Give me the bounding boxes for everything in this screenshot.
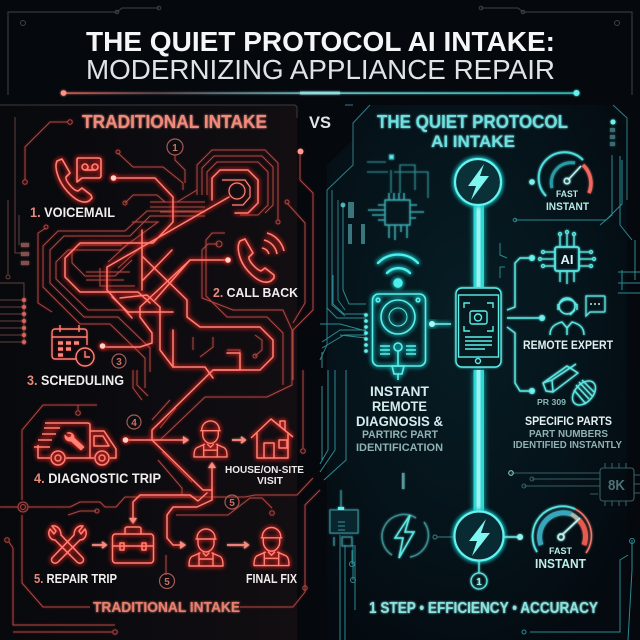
- label: top gauge fast instant: [546, 189, 589, 213]
- label: specific parts: SPECIFIC PARTS: [525, 416, 612, 428]
- connector pins on device: [364, 313, 368, 353]
- panel: traditional intake: [0, 105, 320, 634]
- icon: 8K chip with traces: [509, 463, 640, 506]
- label: call back: 2. CALL BACK: [213, 285, 299, 300]
- icon: smartphone with camera: [456, 288, 501, 367]
- step one marker: 1: [476, 577, 482, 588]
- icon: house: [251, 419, 293, 458]
- arrow: technician to final fix: [227, 542, 248, 548]
- header divider line with red and cyan endpoints: [61, 90, 579, 96]
- numbered step markers: [112, 139, 239, 588]
- dim background circuit traces: [320, 155, 640, 640]
- speech bubble dots: [590, 303, 600, 305]
- label: instant remote diagnosis: INSTANT: [370, 384, 430, 399]
- label: bottom gauge fast instant: [535, 546, 586, 571]
- central vertical glowing bar: [474, 205, 484, 513]
- icon: ai chip: [538, 230, 596, 284]
- label: bottom gauge fast instant: INSTANT: [535, 557, 586, 571]
- panel frame: [0, 105, 297, 118]
- connector device to phone: [429, 321, 451, 327]
- arrow: wrenches to toolbox: [92, 542, 106, 548]
- heading: quiet protocol ai intake: [377, 112, 568, 151]
- icon: bottom bolt circle: [454, 512, 504, 560]
- left edge circuit details: [0, 117, 25, 345]
- icon: top bolt circle: [455, 159, 501, 205]
- footer tagline: 1 STEP • EFFICIENCY • ACCURACY: [369, 600, 599, 617]
- title: [86, 26, 555, 85]
- connector to top gauge: [503, 181, 532, 183]
- heading: traditional intake: TRADITIONAL INTAKE: [82, 112, 267, 132]
- icon: technician: [194, 421, 227, 457]
- icon: phone with voicemail: [56, 158, 101, 202]
- label: house on-site visit: VISIT: [257, 476, 283, 487]
- step marker numerals: 3: [116, 357, 122, 368]
- label: bottom gauge fast instant: FAST: [549, 546, 572, 557]
- label: AI on chip: AI: [560, 252, 574, 267]
- step marker numerals: 4: [131, 418, 137, 429]
- label: final fix: FINAL FIX: [246, 572, 298, 586]
- panel: quiet protocol: [320, 112, 640, 640]
- label: instant remote diagnosis: [356, 384, 443, 454]
- label: voicemail: 1. VOICEMAIL: [30, 205, 115, 220]
- label: instant remote diagnosis: REMOTE: [372, 399, 427, 414]
- right panel background: [327, 105, 627, 640]
- label: scheduling: 3. SCHEDULING: [27, 373, 124, 388]
- step marker numerals: [116, 143, 235, 588]
- label: instant remote diagnosis: IDENTIFICATION: [356, 442, 443, 454]
- arrow: technician to house: [232, 437, 245, 443]
- step one marker: [471, 561, 487, 589]
- chip icon with traces, upper left: [367, 155, 428, 240]
- label: house on-site visit: [225, 465, 304, 487]
- label: instant remote diagnosis: PARTIRC PART: [362, 429, 438, 441]
- connector dot: [529, 179, 535, 185]
- central divider traces: [320, 105, 627, 360]
- label: top gauge fast instant: INSTANT: [546, 201, 589, 213]
- top right status dots: [610, 120, 616, 146]
- endpoint dots on process paths: [100, 175, 231, 443]
- label: top gauge fast instant: FAST: [556, 189, 578, 199]
- connector to dim bolt: [433, 535, 453, 539]
- icon: remote diagnostic camera device: [372, 294, 426, 380]
- heading: quiet protocol ai intake: AI INTAKE: [431, 132, 515, 151]
- icon: phone call back: [238, 233, 284, 282]
- icon: top speed gauge: [539, 152, 591, 196]
- small chip module, lower left: [330, 490, 358, 546]
- step marker numerals: 5: [164, 577, 170, 588]
- step marker numerals: 5: [229, 498, 235, 509]
- title: MODERNIZING APPLIANCE REPAIR: [86, 54, 555, 85]
- connector to bottom gauge: [504, 534, 523, 540]
- connector phone to ai chip: [507, 256, 544, 393]
- left panel background: [0, 105, 297, 640]
- header frame circuitry: [8, 6, 632, 95]
- title: THE QUIET PROTOCOL AI INTAKE:: [86, 26, 555, 57]
- label: house on-site visit: HOUSE/ON-SITE: [225, 465, 304, 476]
- dim background circuit traces: [0, 120, 320, 634]
- label: instant remote diagnosis: DIAGNOSIS &: [356, 414, 443, 429]
- icon: remote expert with speech bubble: [550, 296, 605, 335]
- tangled process paths: [65, 170, 273, 545]
- spiral core: [222, 180, 250, 205]
- label: diagnostic trip: 4. DIAGNOSTIC TRIP: [34, 471, 161, 486]
- label: specific parts: PART NUMBERS: [529, 428, 608, 440]
- label: part number: PR 309: [537, 398, 567, 407]
- icon: dim bolt circle: [382, 514, 428, 558]
- label: specific parts: [513, 416, 622, 451]
- icon: spare parts: [543, 364, 600, 409]
- label: remote expert: REMOTE EXPERT: [523, 340, 613, 352]
- footer heading: traditional intake: TRADITIONAL INTAKE: [93, 600, 240, 616]
- flow arrowheads: [129, 436, 216, 549]
- icon: calendar with clock: [52, 325, 94, 366]
- label: specific parts: IDENTIFIED INSTANTLY: [513, 439, 622, 451]
- icon: technician two: [189, 529, 223, 566]
- label: repair trip: 5. REPAIR TRIP: [34, 572, 117, 586]
- heading: quiet protocol ai intake: THE QUIET PROTOCOL: [377, 112, 568, 132]
- label: 8K: 8K: [608, 477, 625, 494]
- side component dots: [21, 243, 29, 344]
- icon: wifi signal: [378, 255, 418, 286]
- icon: service truck: [34, 423, 116, 465]
- icon: technician three: [254, 528, 289, 566]
- VS label: VS: [309, 113, 331, 132]
- icon: toolbox: [112, 527, 154, 563]
- icon: bottom speed gauge: [533, 506, 591, 553]
- component text blocks, left edge: [340, 202, 365, 244]
- icon: crossed wrenches: [49, 526, 86, 563]
- faint glow stub: [402, 473, 404, 489]
- step marker numerals: 1: [172, 143, 178, 154]
